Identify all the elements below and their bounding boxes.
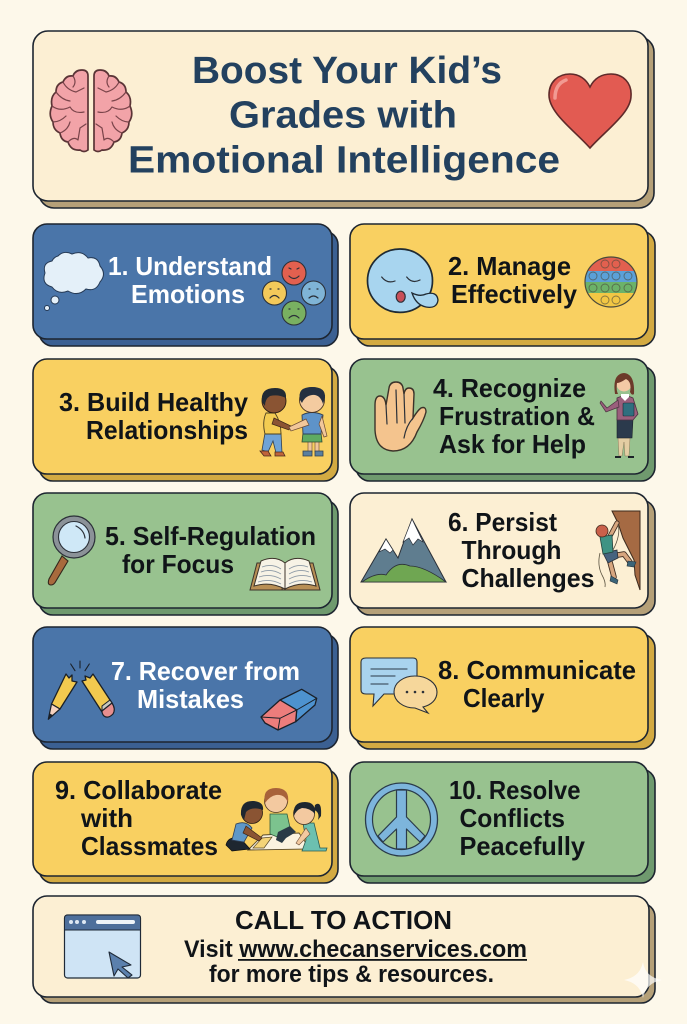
- icon: browser window: [64, 915, 140, 978]
- heading 7: [111, 656, 300, 714]
- card 2: manage effectively: [350, 224, 655, 346]
- icon: teacher: [600, 373, 638, 458]
- title: Grades with: [229, 94, 457, 136]
- icon: magnifying glass: [48, 516, 95, 585]
- icon: rock climber: [596, 511, 640, 590]
- card 5: self-regulation: [33, 493, 338, 615]
- heading 4: 4. Recognize: [433, 373, 586, 403]
- heading 9: with: [80, 803, 133, 833]
- heading 9: Classmates: [81, 831, 218, 861]
- icon: brain: [50, 70, 132, 152]
- heading 2: Effectively: [451, 279, 578, 309]
- icon: speech bubbles: [361, 658, 437, 713]
- panel: call to action: [33, 896, 655, 1003]
- icon: raised hand: [375, 382, 426, 451]
- card 8: communicate clearly: [350, 627, 655, 749]
- heading 10: 10. Resolve: [449, 775, 580, 805]
- heading 6: [448, 507, 594, 593]
- heading 7: Mistakes: [137, 684, 244, 714]
- card 7: recover from mistakes: [33, 627, 338, 749]
- title: Emotional Intelligence: [128, 140, 560, 182]
- heading 4: [433, 373, 595, 459]
- card 3: healthy relationships: [33, 359, 338, 481]
- heading 5: for Focus: [122, 549, 234, 579]
- heading 8: [438, 655, 636, 713]
- heading 6: Through: [462, 535, 562, 565]
- heading 8: 8. Communicate: [438, 655, 636, 685]
- heading 2: [448, 251, 578, 309]
- heading 10: Conflicts: [460, 803, 565, 833]
- heading 6: Challenges: [462, 563, 594, 593]
- heading 7: 7. Recover from: [111, 656, 300, 686]
- heading 3: [59, 387, 249, 445]
- heading 3: Relationships: [86, 415, 248, 445]
- heading 9: 9. Collaborate: [55, 775, 222, 805]
- heading 4: Ask for Help: [439, 429, 586, 459]
- call to action text: Visit www.checanservices.com: [184, 936, 527, 963]
- heading 4: Frustration &: [439, 401, 595, 431]
- heading 1: 1. Understand: [108, 251, 272, 281]
- icon: kids shaking hands: [260, 387, 327, 456]
- heading 2: 2. Manage: [448, 251, 571, 281]
- heading 1: [108, 251, 272, 309]
- heading 6: 6. Persist: [448, 507, 557, 537]
- icon: peace symbol: [366, 783, 438, 856]
- call to action text: CALL TO ACTION: [235, 905, 452, 935]
- icon: sparkle: [624, 962, 662, 998]
- icon: emotion faces: [262, 261, 326, 325]
- icon: children collaborating: [226, 788, 327, 851]
- heading 10: Peacefully: [460, 831, 586, 861]
- heading 1: Emotions: [131, 279, 245, 309]
- panel: header: [33, 31, 654, 208]
- title: Boost Your Kid’s: [192, 50, 502, 92]
- card 1: understand emotions: [33, 224, 338, 346]
- icon: eraser: [261, 689, 317, 730]
- heading 3: 3. Build Healthy: [59, 387, 249, 417]
- icon: broken pencil: [48, 661, 114, 719]
- icon: breathing face: [368, 249, 438, 312]
- card 6: persist through challenges: [350, 493, 655, 615]
- icon: mountains: [361, 519, 446, 582]
- call to action text: [184, 905, 527, 988]
- title: [128, 50, 560, 182]
- card 9: collaborate with classmates: [33, 762, 338, 883]
- icon: open book: [250, 558, 320, 590]
- icon: thought cloud: [44, 252, 104, 310]
- heading 5: 5. Self-Regulation: [105, 521, 316, 551]
- heading 5: [105, 521, 316, 579]
- icon: pop-it toy: [584, 256, 638, 308]
- card 4: recognize frustration: [350, 359, 655, 481]
- call to action text: for more tips & resources.: [209, 961, 494, 988]
- heading 9: [55, 775, 222, 861]
- icon: heart: [549, 74, 631, 148]
- heading 10: [449, 775, 586, 861]
- card 10: resolve conflicts: [350, 762, 655, 883]
- heading 8: Clearly: [463, 683, 545, 713]
